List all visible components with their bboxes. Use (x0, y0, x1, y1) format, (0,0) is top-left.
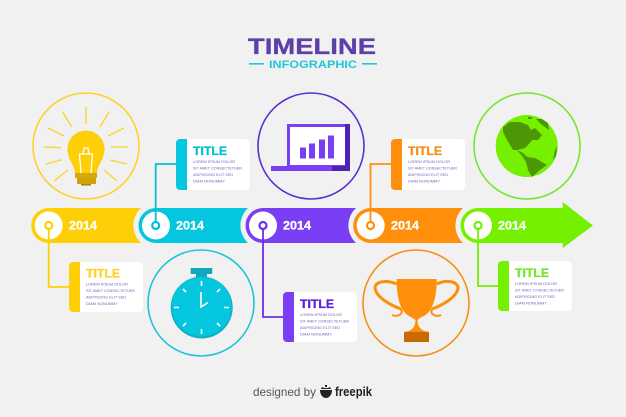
card: yellow title: TITLE (86, 268, 120, 280)
timeline bar: yellow 2014 (31, 208, 141, 243)
timeline bar: orange 2014: 2014 (391, 220, 420, 232)
card: cyan title: DIAM NONUMMY (193, 180, 225, 184)
card: orange title: DIAM NONUMMY (408, 180, 440, 184)
connector: cyan (152, 164, 177, 229)
card: purple title: DIAM NONUMMY (300, 332, 332, 336)
footer credit: freepik (335, 384, 373, 399)
card: cyan title: ADIPISCING ELIT SED (193, 173, 233, 177)
icon circle: trophy (363, 250, 469, 356)
card: yellow title: SIT AMET CONSECTETUER (86, 289, 135, 293)
card: yellow title (69, 262, 143, 312)
card: yellow title: DIAM NONUMMY (86, 302, 118, 306)
timeline bar: cyan 2014 (138, 208, 248, 243)
title: TIMELINE (248, 34, 376, 59)
card: purple title: LOREM IPSUM DOLOR (300, 313, 342, 317)
card: green title: SIT AMET CONSECTETUER (515, 288, 564, 292)
timeline bar: purple 2014: 2014 (283, 220, 312, 232)
connector: yellow (45, 222, 70, 287)
icon circle: stopwatch (148, 250, 254, 356)
card: purple title: SIT AMET CONSECTETUER (300, 320, 349, 324)
card: purple title: TITLE (300, 299, 334, 311)
card: green title: TITLE (515, 268, 549, 280)
card: cyan title: LOREM IPSUM DOLOR (193, 160, 235, 164)
footer credit: designed by (253, 385, 316, 399)
card: purple title (283, 292, 357, 342)
title (248, 34, 377, 71)
card: orange title: ADIPISCING ELIT SED (408, 173, 448, 177)
card: yellow title: ADIPISCING ELIT SED (86, 296, 126, 300)
timeline bar: purple 2014 (246, 208, 356, 243)
card: cyan title: TITLE (193, 146, 227, 158)
card: orange title (391, 139, 465, 190)
card: cyan title (176, 139, 250, 190)
card: orange title: TITLE (408, 146, 442, 158)
card: orange title: LOREM IPSUM DOLOR (408, 160, 450, 164)
timeline arrow: green 2014: 2014 (498, 220, 527, 232)
timeline arrow: green 2014 (460, 202, 593, 248)
card: yellow title: LOREM IPSUM DOLOR (86, 282, 128, 286)
connector: purple (260, 222, 284, 317)
timeline bar: yellow 2014: 2014 (69, 220, 98, 232)
icon circle: light bulb (33, 93, 139, 199)
card: green title: ADIPISCING ELIT SED (515, 295, 555, 299)
card: green title: DIAM NONUMMY (515, 302, 547, 306)
footer credit (253, 384, 373, 399)
connector: green (474, 222, 499, 286)
title: INFOGRAPHIC (269, 59, 357, 71)
timeline bar: cyan 2014: 2014 (176, 220, 205, 232)
card: green title (498, 261, 572, 311)
card: green title: LOREM IPSUM DOLOR (515, 282, 557, 286)
card: orange title: SIT AMET CONSECTETUER (408, 166, 457, 170)
icon circle: globe (474, 93, 580, 199)
connector: orange (367, 164, 392, 229)
timeline bar: orange 2014 (353, 208, 463, 243)
icon circle: laptop chart (258, 93, 364, 199)
card: purple title: ADIPISCING ELIT SED (300, 326, 340, 330)
card: cyan title: SIT AMET CONSECTETUER (193, 166, 242, 170)
